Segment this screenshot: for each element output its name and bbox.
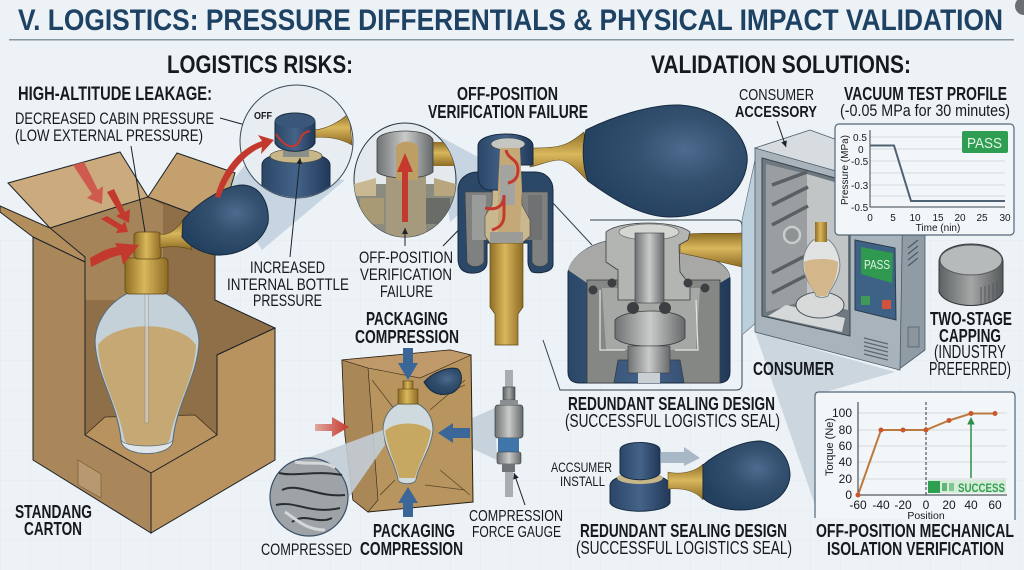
vacuum chamber [742,130,925,370]
outer blue sleeve [458,172,553,273]
lower cylinder [262,156,330,198]
zoom cone: cross-section [437,135,480,222]
ball bearings [588,278,710,314]
crumpled bag [342,350,473,512]
callout: increased internal bottle pressure: INTERNAL BOTTLE [227,275,349,294]
label: standard carton: CARTON [24,519,82,539]
callout: off-position verification failure: OFF-POSITION [359,248,453,267]
data line [858,414,995,495]
brass stem [530,132,588,181]
text block: high-altitude leakage: HIGH-ALTITUDE LEAKAGE: [18,84,212,105]
blue arrow bottom [398,487,418,517]
brass stem [680,233,742,267]
grey direction arrow [661,447,700,466]
pass screen [861,247,893,283]
callout: off-position verification failure: FAILURE [380,282,433,301]
panel [835,124,1014,235]
label: consumer accessory [735,87,817,147]
success arrow [970,420,972,478]
label: packaging compression top: PACKAGING [366,309,448,329]
data points [856,411,998,498]
heading: vacuum test profile [840,84,1010,120]
small bottle [383,404,433,484]
blue head [478,134,533,190]
carton front right face [151,328,275,533]
caption: off-position mechanical isolation verification [816,521,1014,559]
glass bottle [95,293,199,454]
label: accsumer install [551,459,612,489]
cavity back wall [807,174,848,310]
x ticks: 15 [932,213,944,224]
x ticks [849,498,1002,512]
inner grey cut [465,192,548,266]
grid lines [870,137,1005,196]
red pressure arrows [73,162,139,267]
test bottle [803,240,840,298]
x ticks: 40 [964,498,978,512]
panel: standard carton with bottle [0,152,275,533]
text block: high-altitude leakage [15,84,214,145]
pass badge [962,131,1008,153]
small bulb [424,368,461,395]
panel outline [543,203,742,390]
compression force gauge: COMPRESSION [469,508,563,525]
label: packaging compression bottom: COMPRESSION [360,539,463,559]
carton interior left wall [50,197,163,300]
red arrow left [315,417,349,437]
dip tube [145,290,148,423]
bottle liquid [98,326,196,448]
label: consumer: CONSUMER [753,359,834,379]
callout arrows: cabin pressure [131,118,267,232]
cross-section pump with large bulb [458,105,747,345]
axes [870,130,1005,207]
x ticks [867,213,1011,224]
caption: redundant sealing design bottom: REDUNDANT SEALING DESIGN [580,521,787,541]
x axis title: Position [907,510,945,522]
tan inner body [485,150,530,243]
label: compressed: COMPRESSED [261,540,352,559]
profile line [870,146,1005,201]
inner art [262,113,352,200]
central column [635,233,664,303]
cap [377,131,433,178]
x ticks: 60 [988,498,1002,512]
chart: vacuum test profile [835,124,1014,235]
success band [928,480,1006,493]
panel [815,392,1015,520]
cavity frame [762,158,850,336]
zoom cone: gauge to packaging [438,408,497,460]
y ticks: 0 [858,145,864,156]
x axis title: Time (nin) [916,223,960,234]
center stem [498,148,522,232]
label: packaging compression bottom: PACKAGING [373,521,455,541]
brass stem [316,115,352,146]
pump stem [160,220,192,250]
vent lines [864,338,888,360]
chamber top [755,130,925,195]
x ticks: 0 [923,498,930,512]
carton front left face [33,237,151,533]
pass badge: PASS [967,135,1002,152]
text block: high-altitude leakage: DECREASED CABIN PRESSURE [15,109,214,128]
buttons [861,296,870,305]
zoom cone: bulb to detail circle [225,165,345,250]
label: standard carton [15,502,92,539]
texture circle: compressed material [270,458,348,536]
icon: two-stage cap [939,244,1003,306]
red leak path [276,131,310,146]
carton interior right wall [85,197,275,473]
grey cylinder top [568,241,730,283]
y ticks: 0 [845,488,852,502]
panel: redundant sealing design detail [543,203,742,390]
label: two-stage capping: CAPPING [939,326,1001,346]
y ticks [851,133,869,214]
success marks [928,481,954,493]
caption: redundant sealing design bottom [576,521,792,558]
label: consumer accessory: CONSUMER [739,87,814,104]
platform [796,292,844,318]
x ticks: -20 [894,498,912,512]
carton right flap [148,153,235,222]
bottle base [121,440,173,454]
label: packaging compression top: COMPRESSION [355,327,459,347]
shelves [772,172,808,293]
y axis title: Torque (Ne) [824,418,836,476]
blue arrow top [398,348,418,380]
off label: OFF [254,111,272,122]
cavity left wall [766,164,807,312]
open door [742,160,757,335]
y ticks: -0.5 [851,203,869,214]
zoom cone: chamber to torque chart [755,332,895,505]
y ticks: 0.5 [853,133,867,144]
label: consumer accessory: ACCESSORY [735,104,817,121]
seal wires [600,290,698,350]
axes [858,402,1007,495]
packaging compression illustration [315,348,473,517]
clipped art [350,131,460,240]
heading: off-position verification failure: VERIFICATION FAILURE [428,102,588,122]
knob [620,442,660,480]
compression force gauge [469,370,563,541]
success label: SUCCESS [958,481,1005,495]
text block: high-altitude leakage: (LOW EXTERNAL PRESSURE) [15,126,203,145]
y ticks: 100 [832,406,852,420]
y ticks: 60 [839,439,852,453]
detail circle: off-position cap [240,85,353,200]
heading: logistics risks: LOGISTICS RISKS: [167,51,353,79]
x ticks: 20 [942,498,956,512]
label: standard carton: STANDANG [15,502,92,522]
caption: redundant sealing design top: (SUCCESSFUL LOGISTICS SEAL) [565,411,780,431]
heading: off-position verification failure: OFF-POSITION [457,84,558,104]
pump collar [125,258,168,294]
chamber right side [898,172,925,370]
callout: increased internal bottle pressure: PRESSURE [253,291,322,310]
label: accsumer install: ACCSUMER [551,459,612,475]
crease lines [372,380,470,495]
label: packaging compression top [355,309,459,347]
large bulb [583,105,747,217]
small assembled pump [610,441,790,511]
brass stem [433,142,454,166]
red arrow [397,153,413,222]
x ticks: 10 [909,213,921,224]
y ticks [832,406,852,502]
carton floor [85,415,217,473]
callout: off-position verification failure: VERIFICATION [360,265,452,284]
y ticks: -0.3 [851,181,869,192]
lower cylinder [610,474,670,511]
grid lines [858,413,1007,479]
heading: validation solutions: VALIDATION SOLUTIONS: [651,51,911,79]
lower stem [628,346,670,373]
grey inner [587,280,720,383]
chart: torque vs position [815,392,1015,522]
chamber front [755,148,903,370]
curved red arrow: leak to detail [215,135,274,198]
x ticks: 5 [890,213,896,224]
bulb [703,441,790,510]
x ticks: 20 [954,213,966,224]
red internal flow [485,150,518,230]
blue arrow right [438,423,470,443]
callout: off-position verification failure [359,208,480,301]
zoom cone: packaging texture [307,430,385,497]
caption: redundant sealing design top [565,394,780,431]
carton front flap [0,206,85,262]
caption: redundant sealing design bottom: (SUCCESSFUL LOGISTICS SEAL) [576,538,792,558]
label: accsumer install: INSTALL [560,473,605,489]
zero dashed line [925,402,927,495]
heading: off-position verification failure [428,84,588,122]
callout: increased internal bottle pressure: INCREASED [250,258,325,277]
x ticks: 25 [976,213,988,224]
knob [275,113,315,151]
stem [668,464,703,500]
x ticks: 30 [999,213,1011,224]
small pump [403,381,413,390]
y ticks: 20 [839,472,852,486]
pass screen: PASS [864,257,890,272]
view port [784,227,800,243]
detail circle: thread cross-section [350,123,460,240]
flange [615,311,685,346]
x ticks: 0 [867,213,873,224]
housing [354,184,456,237]
caption: redundant sealing design top: REDUNDANT SEALING DESIGN [568,394,775,414]
pump cap [134,232,161,259]
y ticks: -0.5 [851,157,869,168]
carton label patch [78,460,101,498]
carton left flap [8,152,148,228]
hex nut [606,223,690,300]
callout: increased internal bottle pressure [227,158,349,310]
label: packaging compression bottom [360,521,463,559]
cavity floor [768,305,845,332]
label: two-stage capping [929,309,1012,379]
blue outer housing [568,241,730,383]
control panel [855,240,896,320]
x ticks: -40 [872,498,890,512]
x ticks: -60 [849,498,867,512]
bulb [182,185,268,255]
y ticks: 40 [839,455,852,469]
brass tip [490,243,523,345]
compression force gauge: FORCE GAUGE [472,524,561,541]
y axis title: Pressure (MPa) [840,135,851,205]
y ticks: 80 [839,423,852,437]
